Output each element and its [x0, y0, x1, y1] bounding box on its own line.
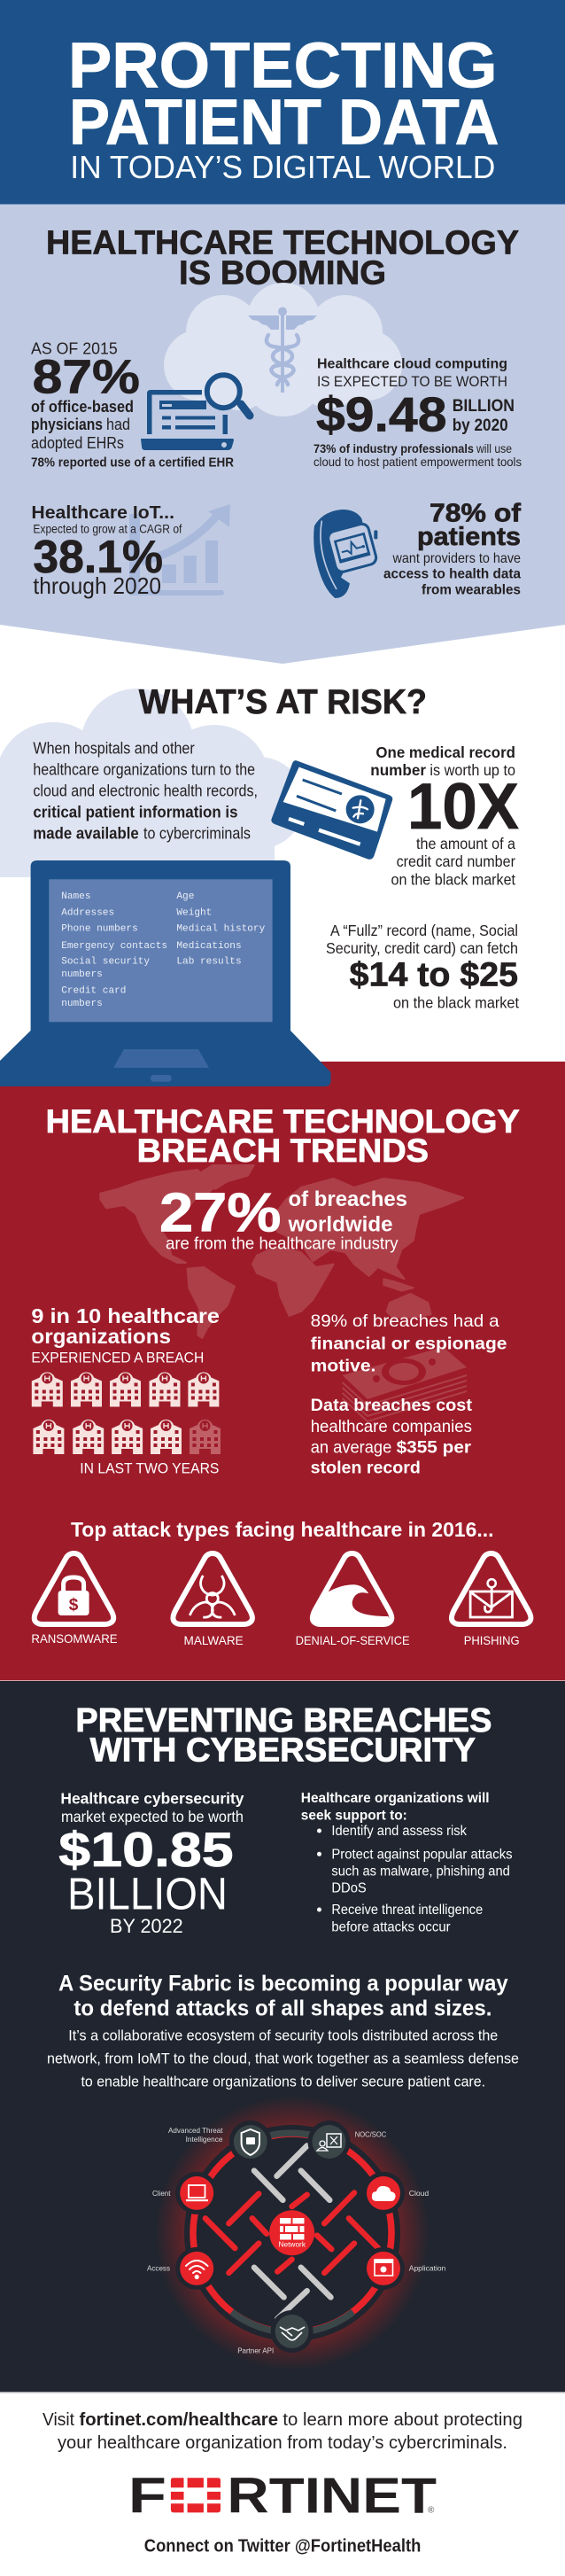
stat: 10X value of record: 10X: [407, 771, 519, 843]
panel: title header: [0, 0, 565, 205]
icon: hospital row one: [32, 1372, 219, 1407]
labels: attack types: PHISHING: [464, 1633, 520, 1647]
ring: [193, 2133, 391, 2332]
text block: intro: cloud and electronic health records,: [33, 782, 258, 800]
heading: [46, 1103, 520, 1169]
icon: laptop with patient data list: [0, 860, 331, 1086]
labels: attack types: [31, 1631, 520, 1647]
list: support needs: Identify and assess risk: [331, 1824, 467, 1839]
stat: 78 percent of patients: patients: [417, 523, 521, 551]
list: support needs: [301, 1791, 513, 1934]
icon: smartwatch: [313, 510, 379, 598]
stat: cloud computing 9.48 billion: BILLION: [453, 396, 515, 416]
text block: intro: to cybercriminals: [143, 825, 251, 843]
icon: hospital row two: [33, 1420, 221, 1454]
icon: denial of service wave: [313, 1553, 391, 1624]
node: application: [362, 2247, 405, 2290]
stat: Fullz record price: [326, 922, 519, 1012]
stat: 9 in 10 organizations: organizations: [31, 1325, 171, 1348]
labels: attack types: RANSOMWARE: [31, 1631, 118, 1646]
list: support needs: Protect against popular attacks: [331, 1847, 513, 1862]
node: cloud: [362, 2172, 405, 2214]
list: data items: Medical history: [176, 924, 266, 935]
stat: motive and cost: $355 per: [397, 1437, 471, 1457]
heading: top attack types: Top attack types facing healthcare in 2016...: [71, 1518, 494, 1541]
labels: diagram: Client: [152, 2189, 171, 2198]
list: data items: numbers: [61, 969, 103, 980]
stat: cloud computing 9.48 billion: will use: [476, 441, 512, 455]
list: support needs: before attacks occur: [331, 1919, 451, 1934]
stat: 78 percent of patients: want providers to have: [392, 551, 521, 566]
heading: PREVENTING BREACHES: [75, 1702, 491, 1739]
stat: 87 percent EHR adoption: had: [106, 415, 130, 433]
labels: diagram: NOC/SOC: [355, 2130, 386, 2139]
stat: healthcare IoT 38.1 percent: Expected to grow at a CAGR of: [33, 522, 182, 536]
list: data items: Age: [176, 891, 194, 902]
panel: breach trends background: [0, 1062, 565, 1680]
icon: stack of money: [343, 1347, 467, 1421]
list: support needs: such as malware, phishing and: [331, 1864, 510, 1879]
labels: diagram: Intelligence: [186, 2135, 223, 2144]
heading: IS BOOMING: [179, 255, 386, 292]
stat: 27 percent of breaches: are from the healthcare industry: [166, 1234, 399, 1253]
text block: intro: healthcare organizations turn to the: [33, 761, 255, 779]
text block: intro: [33, 740, 258, 843]
text block: security fabric: to enable healthcare organizations to deliver secure patient care.: [81, 2074, 485, 2090]
stat: motive and cost: 89% of breaches had a: [311, 1311, 499, 1331]
heading: BREACH TRENDS: [137, 1132, 429, 1169]
stat: healthcare IoT 38.1 percent: 38.1%: [33, 532, 163, 583]
stat: 27 percent of breaches: 27%: [159, 1183, 281, 1244]
stat: healthcare IoT 38.1 percent: Healthcare IoT...: [31, 502, 174, 523]
icon: cloud background: [0, 689, 305, 895]
stat: 87 percent EHR adoption: [31, 339, 234, 471]
stat: market worth 10.85 billion: BY 2022: [110, 1915, 183, 1937]
panel: what's at risk: [0, 683, 519, 1086]
list: data items: numbers: [61, 999, 103, 1009]
text block: security fabric: A Security Fabric is becoming a popular way: [58, 1972, 508, 1996]
stat: cloud computing 9.48 billion: by 2020: [453, 416, 508, 435]
list: data items: Emergency contacts: [61, 941, 167, 952]
stat: Fullz record price: Security, credit card) can fetch: [326, 939, 518, 957]
title line 1: PROTECTING: [68, 31, 498, 102]
stat: 78 percent of patients: access to health data: [383, 567, 521, 582]
stat: 9 in 10 organizations: IN LAST TWO YEARS: [80, 1460, 219, 1477]
call to action: Visit: [43, 2410, 74, 2430]
stat: 78 percent of patients: from wearables: [422, 583, 521, 598]
stat: 10X value of record: number: [370, 761, 426, 779]
text block: intro: critical patient information is: [33, 804, 238, 821]
logo: Fortinet: F: [128, 2467, 166, 2524]
labels: diagram: Access: [147, 2264, 170, 2273]
stat: motive and cost: motive.: [311, 1356, 375, 1375]
stat: 9 in 10 organizations: EXPERIENCED A BREACH: [31, 1349, 204, 1366]
labels: diagram: Partner API: [237, 2346, 274, 2355]
stat: motive and cost: financial or espionage: [311, 1334, 507, 1353]
panel: preventing breaches: [0, 1680, 565, 2392]
node: advanced threat intelligence: [229, 2121, 272, 2163]
icon: phishing: [452, 1553, 530, 1624]
stat: cloud computing 9.48 billion: [313, 357, 522, 469]
stat: 27 percent of breaches: of breaches: [289, 1187, 407, 1211]
node: NOC/SOC: [308, 2121, 351, 2163]
stat: 9 in 10 organizations: 9 in 10 healthcare: [31, 1304, 220, 1327]
labels: diagram: [147, 2126, 446, 2355]
stat: healthcare IoT 38.1 percent: through 2020: [33, 572, 161, 599]
icon: medical credit card: [271, 760, 392, 860]
stat: market worth 10.85 billion: $10.85: [58, 1822, 234, 1877]
text block: intro: made available: [33, 825, 139, 843]
weave: red strands: [205, 2192, 378, 2273]
stat: 87 percent EHR adoption: of office-based: [31, 397, 134, 416]
heading: HEALTHCARE TECHNOLOGY: [46, 225, 519, 262]
icon: ransomware: [35, 1553, 113, 1624]
subtitle: IN TODAY’S DIGITAL WORLD: [70, 149, 495, 185]
stat: 10X value of record: credit card number: [397, 852, 515, 870]
labels: diagram: Cloud: [409, 2189, 429, 2198]
call to action: your healthcare organization from today’s cybercriminals.: [58, 2433, 507, 2453]
stat: motive and cost: healthcare companies: [311, 1417, 472, 1436]
list: data items: Credit card: [61, 986, 126, 997]
heading: WITH CYBERSECURITY: [90, 1732, 476, 1770]
list: data items: Addresses: [61, 908, 114, 919]
list: data items: Social security: [61, 957, 150, 968]
stat: motive and cost: an average: [311, 1437, 391, 1457]
heading: [46, 225, 519, 292]
stat: cloud computing 9.48 billion: IS EXPECTED TO BE WORTH: [317, 373, 507, 390]
list: support needs: DDoS: [331, 1880, 367, 1895]
list: support needs: seek support to:: [301, 1808, 407, 1823]
list: support needs: Healthcare organizations will: [301, 1791, 490, 1806]
logo: Fortinet: [128, 2467, 437, 2524]
weave: grey strands: [254, 2145, 331, 2319]
node: network: [269, 2210, 314, 2255]
node: network: Network: [278, 2240, 306, 2249]
stat: healthcare IoT 38.1 percent: [31, 502, 182, 599]
icon: cloud background: [164, 283, 402, 416]
stat: 10X value of record: on the black market: [391, 871, 515, 889]
list: data items: Medications: [176, 941, 242, 952]
chart: security fabric diagram: [147, 2096, 446, 2370]
stat: 87 percent EHR adoption: physicians: [31, 415, 103, 433]
panel: breach trends content: [31, 1103, 530, 1647]
list: support needs: Receive threat intelligence: [331, 1903, 483, 1918]
title line 2: PATIENT DATA: [69, 88, 499, 159]
list: data items: Lab results: [176, 957, 242, 968]
icon: ransomware: $: [69, 1596, 79, 1615]
stat: cloud computing 9.48 billion: cloud to host patient empowerment tools: [313, 455, 522, 469]
world map: [100, 1165, 463, 1338]
heading: HEALTHCARE TECHNOLOGY: [46, 1103, 520, 1140]
stat: 78 percent of patients: 78% of: [430, 499, 521, 527]
stat: motive and cost: Data breaches cost: [311, 1396, 473, 1415]
stat: 10X value of record: [370, 743, 519, 889]
text block: security fabric: [47, 1972, 519, 2090]
panel: footer: [0, 2392, 565, 2556]
stat: 10X value of record: is worth up to: [430, 761, 515, 779]
list: data items: [61, 891, 266, 1009]
text block: security fabric: It’s a collaborative ecosystem of security tools distributed across the: [68, 2027, 498, 2044]
node: partner API: [271, 2310, 313, 2353]
stat: cloud computing 9.48 billion: 73% of industry professionals: [313, 441, 474, 455]
text block: security fabric: to defend attacks of all shapes and sizes.: [74, 1996, 491, 2020]
icon: malware: [173, 1553, 252, 1624]
list: data items: Weight: [176, 908, 212, 919]
icon: laptop with magnifying glass: [141, 375, 250, 450]
call to action: [43, 2410, 522, 2453]
stat: 87 percent EHR adoption: 87%: [33, 350, 140, 403]
stat: market worth 10.85 billion: [58, 1790, 244, 1937]
stat: 9 in 10 organizations: [31, 1304, 220, 1477]
stat: 10X value of record: the amount of a: [416, 835, 515, 852]
stat: market worth 10.85 billion: BILLION: [67, 1868, 228, 1918]
stat: motive and cost: [311, 1311, 507, 1478]
labels: diagram: Application: [409, 2264, 446, 2273]
stat: market worth 10.85 billion: Healthcare cybersecurity: [60, 1790, 244, 1808]
stat: 87 percent EHR adoption: adopted EHRs: [31, 433, 124, 452]
social link: Connect on Twitter @FortinetHealth: [144, 2536, 421, 2556]
call to action: to learn more about protecting: [282, 2410, 522, 2430]
stat: motive and cost: stolen record: [311, 1459, 421, 1478]
labels: attack types: DENIAL-OF-SERVICE: [296, 1633, 410, 1647]
call to action: fortinet.com/healthcare: [80, 2410, 278, 2430]
node: client: [175, 2172, 218, 2214]
stat: Fullz record price: $14 to $25: [350, 957, 518, 994]
stat: 27 percent of breaches: [159, 1183, 407, 1253]
stat: 10X value of record: One medical record: [375, 743, 515, 761]
heading: WHAT’S AT RISK?: [139, 683, 427, 721]
panel: healthcare technology is booming: [0, 205, 565, 664]
icon: caduceus: [248, 307, 317, 393]
text block: intro: When hospitals and other: [33, 740, 195, 758]
labels: diagram: Advanced Threat: [168, 2126, 223, 2135]
stat: cloud computing 9.48 billion: Healthcare cloud computing: [317, 357, 507, 372]
stat: Fullz record price: A “Fullz” record (name, Social: [330, 922, 518, 939]
stat: 27 percent of breaches: worldwide: [287, 1213, 393, 1237]
heading: [75, 1702, 491, 1770]
stat: Fullz record price: on the black market: [393, 994, 519, 1012]
stat: 78 percent of patients: [383, 499, 521, 598]
stat: cloud computing 9.48 billion: $9.48: [316, 387, 446, 442]
logo: Fortinet: ®: [428, 2505, 435, 2515]
list: data items: Names: [61, 891, 90, 902]
logo: Fortinet: RTINET: [227, 2467, 437, 2524]
list: data items: Phone numbers: [61, 924, 138, 935]
node: access: [175, 2247, 218, 2290]
stat: market worth 10.85 billion: market expected to be worth: [61, 1808, 244, 1825]
icon: growth chart: [129, 504, 230, 595]
stat: 87 percent EHR adoption: 78% reported use of a certified EHR: [31, 455, 234, 471]
stat: 87 percent EHR adoption: AS OF 2015: [31, 339, 118, 357]
text block: security fabric: network, from IoMT to the cloud, that work together as a seamless defense: [47, 2051, 519, 2067]
labels: attack types: MALWARE: [184, 1633, 244, 1647]
